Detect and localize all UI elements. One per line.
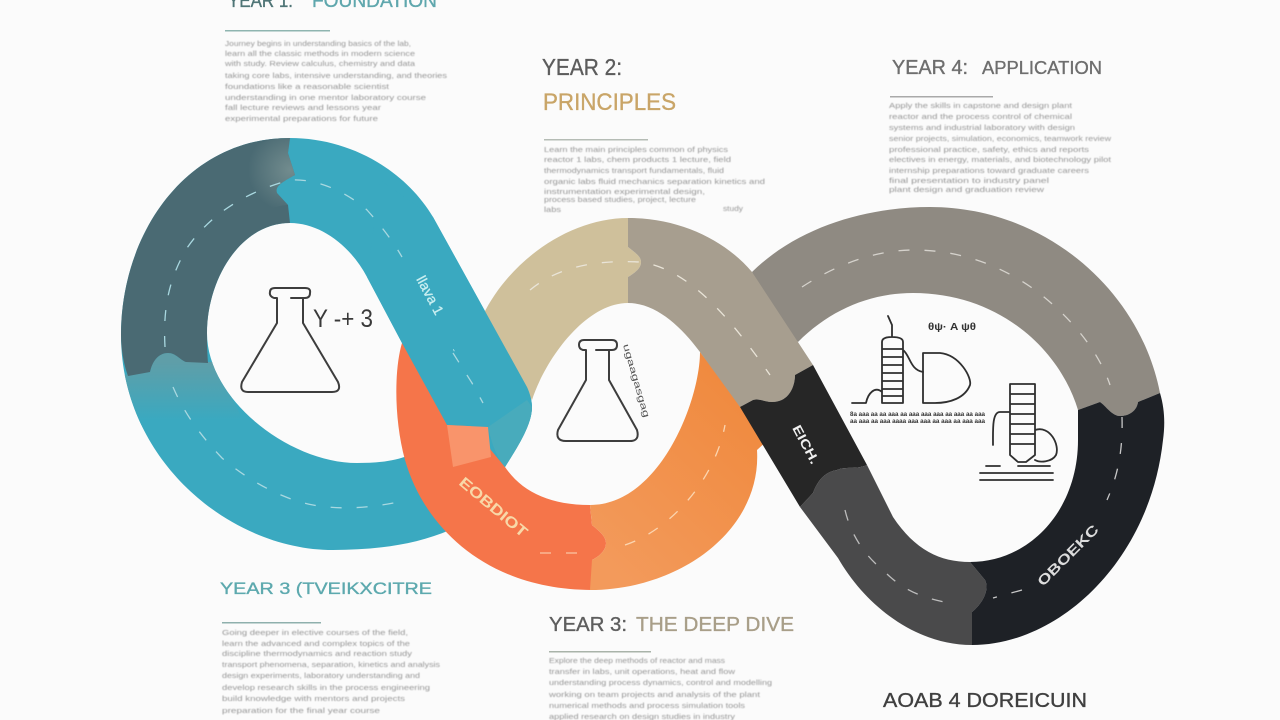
text block: year 1: foundations like a reasonable scientist xyxy=(225,82,390,91)
text block: year 1 xyxy=(224,39,447,123)
text block: year 4: electives in energy, materials, and biotechnology pilot xyxy=(889,155,1112,164)
text block: year 3 middle: understanding process dynamics, control and modelling xyxy=(549,678,772,687)
heading: year 1 foundation xyxy=(228,0,437,12)
road dashes: dark gray xyxy=(845,510,950,603)
ribbon: dark teal highlight xyxy=(235,138,295,216)
text block: year 2: labs xyxy=(544,205,561,214)
text block: year 3 middle xyxy=(548,656,772,720)
text block: year 2: process based studies, project, lecture xyxy=(544,195,696,204)
rule: year 3 middle xyxy=(549,651,651,652)
text block: year 4: systems and industrial laboratory with design xyxy=(889,123,1075,132)
text block: year 3 left: design experiments, laboratory understanding and xyxy=(222,671,420,680)
text block: year 3 left xyxy=(222,628,440,715)
text block: year 3 left: preparation for the final year course xyxy=(222,706,380,715)
ribbon label: teal band tick: - xyxy=(449,346,459,354)
road dashes: teal loop xyxy=(165,180,402,347)
text block: year 3 left: develop research skills in the process engineering xyxy=(222,683,430,692)
text block: year 3 middle: numerical methods and process simulation tools xyxy=(549,701,745,710)
ribbon label: teal band: llava 1 xyxy=(413,273,447,318)
text block: year 3 left: discipline thermodynamics and reaction study xyxy=(222,649,412,658)
text block: year 1: taking core labs, intensive understanding, and theories xyxy=(225,71,447,80)
ribbon label: black loop: OBOEKC xyxy=(1034,521,1102,589)
apparatus: caption two: aa aaa aa aaa aaaa aaa aaa aa aaa aa aaa aaa xyxy=(850,418,985,425)
text block: year 2: organic labs fluid mechanics separation kinetics and xyxy=(544,177,765,186)
text block: year 3 left: learn the advanced and complex topics of the xyxy=(222,639,410,648)
road dashes: teal band lower xyxy=(453,353,483,403)
apparatus: caption: 8a aaa aa aa aaa aa aaa aaa aaa aa aaa aa aaa xyxy=(850,411,985,418)
road dashes: gray loop xyxy=(802,250,1110,385)
apparatus: distillation column one xyxy=(852,316,923,403)
ribbon: black segment xyxy=(970,393,1164,645)
ribbon: dark gray segment xyxy=(800,465,987,645)
text block: year 4: internship preparations toward graduate careers xyxy=(889,166,1089,175)
heading: year 2 principles: YEAR 2: xyxy=(542,54,622,80)
ribbon: band tip tint xyxy=(488,400,532,467)
icon label: flask one formula: Y -+ 3 xyxy=(313,305,373,333)
icon: apparatus xyxy=(850,316,1057,480)
text block: year 1: Journey begins in understanding basics of the lab, xyxy=(225,39,411,48)
ribbon: light orange segment xyxy=(590,352,768,590)
heading: year 4 application xyxy=(892,57,1102,79)
infinity ribbon diagram xyxy=(115,138,1164,645)
road dashes: teal loop lower xyxy=(173,387,398,508)
apparatus: top note: θψ· A ψθ xyxy=(928,322,976,333)
text block: year 4: senior projects, simulation, economics, teamwork review xyxy=(889,134,1112,143)
heading: year 3 the deep dive: THE DEEP DIVE xyxy=(636,614,794,636)
text block: year 1: experimental preparations for future xyxy=(225,114,378,123)
text block: year 4: Apply the skills in capstone and design plant xyxy=(889,101,1073,110)
text block: year 4 xyxy=(889,101,1112,194)
road dashes: black loop xyxy=(1107,417,1122,500)
ribbon: taupe band xyxy=(628,218,813,407)
heading: year 3 the deep dive: YEAR 3: xyxy=(549,614,627,636)
text block: year 2: thermodynamics transport fundamentals, fluid xyxy=(544,166,724,175)
heading: year 3 left: YEAR 3 (TVEIKXCITRE xyxy=(220,579,432,598)
text block: year 2 xyxy=(544,145,765,214)
ribbon label: orange: EOBDIOT xyxy=(455,474,531,541)
text block: year 1: with study. Review calculus, chemistry and data xyxy=(224,59,416,68)
ribbon: teal loop base xyxy=(121,138,532,550)
text block: year 4: reactor and the process control of chemical xyxy=(889,112,1072,121)
text block: year 3 middle: working on team projects and analysis of the plant xyxy=(548,690,761,699)
text block: year 2: Learn the main principles common of physics xyxy=(544,145,728,154)
text block: year 3 middle: Explore the deep methods of reactor and mass xyxy=(549,656,725,665)
icon: flask two xyxy=(557,340,652,441)
icon: flask one xyxy=(241,288,373,392)
rule: year 3 left xyxy=(222,622,321,624)
road dashes: beige and taupe xyxy=(530,262,770,375)
text block: year 3 left: build knowledge with mentors and projects xyxy=(222,694,405,703)
heading: year 4 application: YEAR 4: xyxy=(892,57,968,79)
ribbon: teal diagonal band xyxy=(367,180,532,467)
text block: year 4: plant design and graduation review xyxy=(889,185,1045,194)
apparatus: distillation column two xyxy=(980,384,1057,480)
heading: year 2 principles: PRINCIPLES xyxy=(543,89,676,116)
road dashes: black lower xyxy=(993,590,1022,598)
heading: year 2 principles xyxy=(542,54,676,116)
text block: year 1: learn all the classic methods in modern science xyxy=(225,49,415,58)
rule: year 2 xyxy=(544,139,648,140)
text block: year 2: study xyxy=(723,204,743,213)
rule: year 4 xyxy=(890,96,993,98)
heading: year 3 the deep dive xyxy=(549,614,794,636)
ribbon: beige arc xyxy=(483,218,641,400)
ribbon: light orange patch xyxy=(447,425,491,467)
ribbon label: black band: EICH. xyxy=(789,422,822,466)
ribbon: black diagonal band xyxy=(740,365,867,507)
heading: year 4 bottom right: AOAB 4 DOREICUIN xyxy=(883,690,1087,712)
ribbon: orange segment xyxy=(396,343,606,590)
heading: year 4 application: APPLICATION xyxy=(982,58,1102,78)
text block: year 1: fall lecture reviews and lessons year xyxy=(225,103,382,112)
ribbon: teal fade segment xyxy=(124,353,236,425)
ribbon: dark teal segment xyxy=(121,138,295,376)
rule: year 1 xyxy=(225,30,330,32)
text block: year 2: reactor 1 labs, chem products 1 lecture, field xyxy=(544,155,731,164)
apparatus: vessel xyxy=(923,353,970,403)
text block: year 3 left: Going deeper in elective courses of the field, xyxy=(222,628,408,637)
text block: year 1: understanding in one mentor laboratory course xyxy=(225,93,426,102)
icon label: flask two formula: ugaagasgag xyxy=(621,343,652,419)
text block: year 4: professional practice, safety, ethics and reports xyxy=(889,145,1089,154)
text block: year 4: final presentation to industry panel xyxy=(889,176,1049,185)
road dashes: light orange xyxy=(625,425,725,545)
road dashes: orange xyxy=(540,552,585,554)
text block: year 3 left: transport phenomena, separation, kinetics and analysis xyxy=(222,660,440,669)
ribbon: gray arc xyxy=(752,207,1160,416)
text block: year 3 middle: transfer in labs, unit operations, heat and flow xyxy=(549,667,736,676)
text block: year 2: instrumentation experimental design, xyxy=(544,187,705,196)
